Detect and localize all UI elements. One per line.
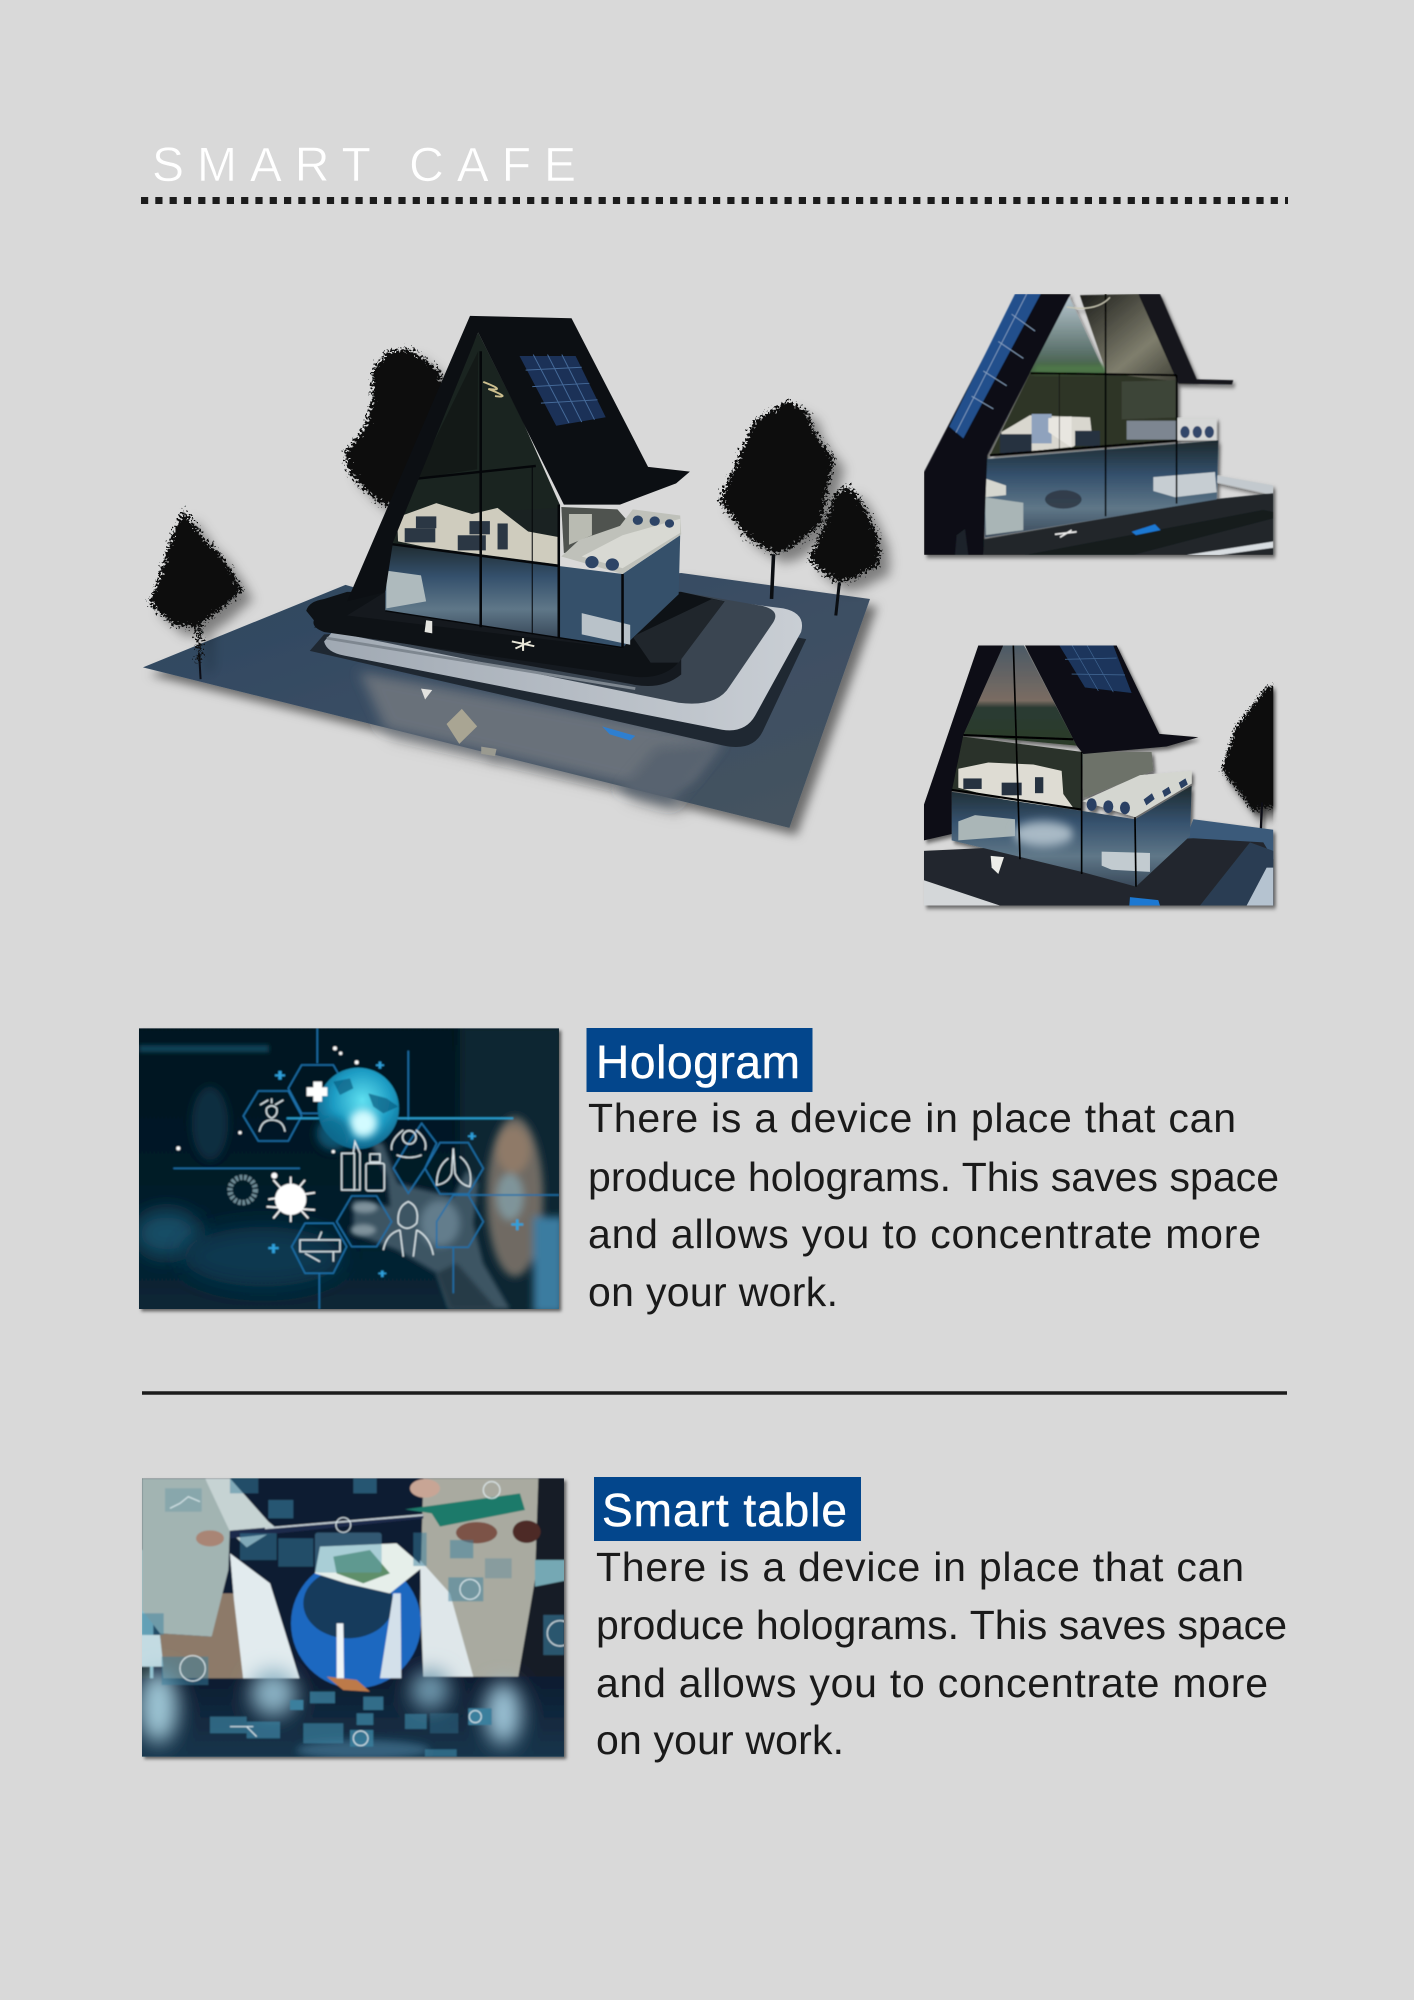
tree behind house bbox=[344, 349, 447, 507]
tree: right small bbox=[809, 486, 880, 582]
smart table label: Smart table bbox=[602, 1484, 847, 1536]
section divider bbox=[142, 1391, 1287, 1395]
tree trunk: right small bbox=[836, 582, 839, 615]
tree trunk: right large bbox=[772, 554, 774, 599]
medical cross bbox=[307, 1082, 327, 1102]
hologram description: on your work. bbox=[588, 1269, 838, 1315]
left person bbox=[138, 1478, 300, 1680]
tree: left bbox=[150, 509, 242, 663]
smart table description: on your work. bbox=[596, 1717, 844, 1763]
lower platform slabs bbox=[306, 592, 806, 747]
blurred person at right bbox=[487, 1117, 563, 1313]
dotted title rule bbox=[141, 197, 1288, 204]
sparkles bbox=[176, 1046, 359, 1179]
smart table description: produce holograms. This saves space bbox=[596, 1602, 1287, 1648]
hand bbox=[351, 1140, 510, 1309]
plus signs bbox=[268, 1062, 523, 1277]
title: SMART CAFE: SMART CAFE bbox=[152, 139, 576, 192]
glowing globe bbox=[317, 1068, 399, 1150]
network lines bbox=[173, 1028, 559, 1309]
cafe logo on floor bbox=[512, 638, 534, 651]
glass building bbox=[385, 332, 681, 648]
widget highlights bbox=[170, 1482, 573, 1746]
hologram description: produce holograms. This saves space bbox=[588, 1154, 1279, 1200]
hologram description bbox=[588, 1095, 1279, 1315]
illustration: side view of cafe bbox=[924, 294, 1273, 555]
tablet and book bbox=[196, 1479, 541, 1546]
section: smart table bbox=[594, 1477, 1287, 1763]
tree: right large bbox=[719, 401, 834, 554]
virus icon bright bbox=[267, 1177, 315, 1222]
illustration: front view of cafe bbox=[924, 645, 1280, 906]
virus icon dim bbox=[230, 1177, 255, 1203]
line icons bbox=[259, 1098, 471, 1262]
right person bbox=[420, 1478, 568, 1677]
hologram label: Hologram bbox=[596, 1036, 800, 1088]
smart table description bbox=[596, 1544, 1287, 1763]
photo: hologram hand bbox=[133, 1025, 563, 1313]
ground plane bbox=[143, 573, 870, 828]
holographic globe bbox=[291, 1533, 423, 1692]
window mullions bbox=[385, 351, 623, 648]
A-frame roof bbox=[347, 316, 690, 601]
hologram description: and allows you to concentrate more bbox=[588, 1211, 1261, 1257]
smart table description: There is a device in place that can bbox=[596, 1544, 1244, 1590]
tree right edge bbox=[1222, 685, 1280, 811]
photo: smart table team and globe bbox=[138, 1475, 573, 1760]
table surface bbox=[138, 1670, 568, 1760]
section: hologram bbox=[586, 1028, 1279, 1315]
solar panel bbox=[519, 355, 606, 426]
hologram description: There is a device in place that can bbox=[588, 1095, 1236, 1141]
smart table description: and allows you to concentrate more bbox=[596, 1660, 1268, 1706]
data widgets bbox=[142, 1478, 564, 1757]
illustration: main smart cafe model bbox=[143, 316, 880, 828]
